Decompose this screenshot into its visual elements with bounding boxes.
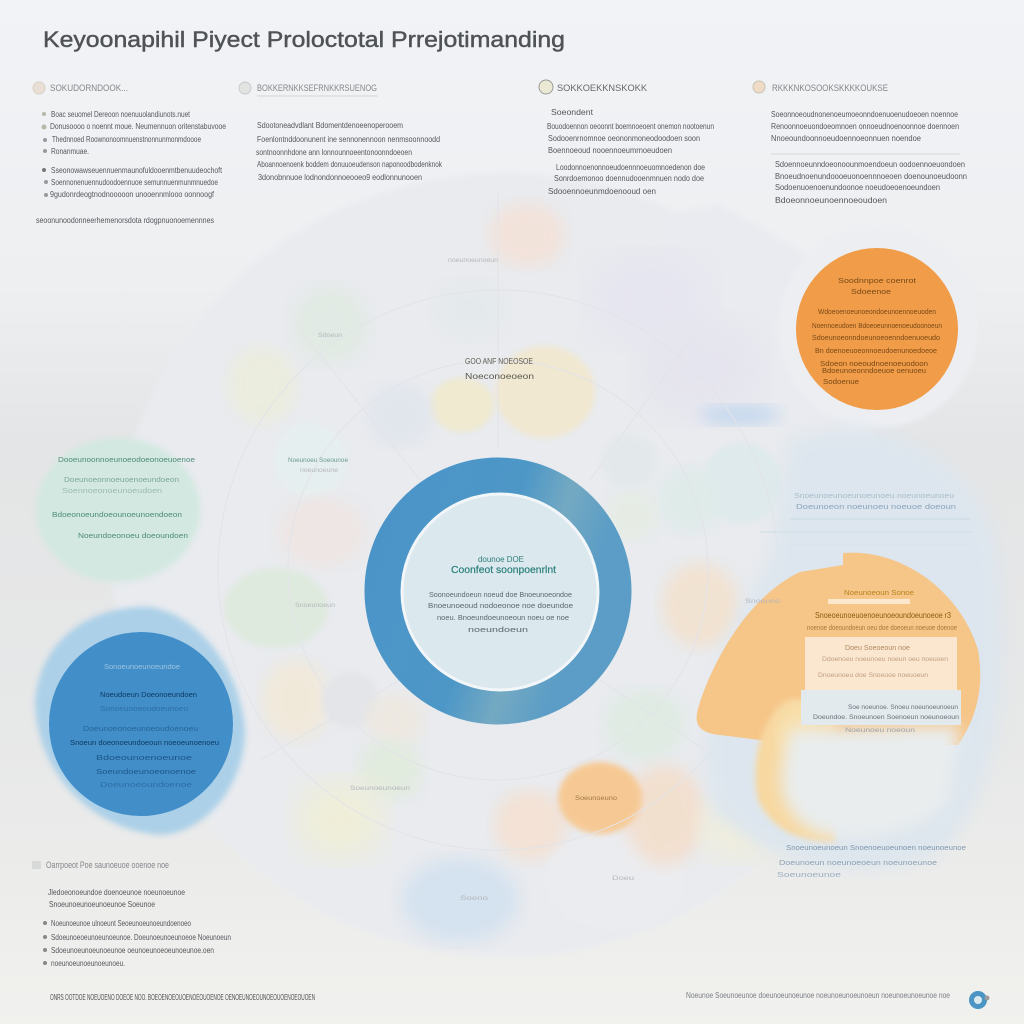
panel: bottom-left text: Sdoeunoeoeunoeunoeunoe. Doeunoeunoeunoeoe Noeunoeun [51,933,231,942]
panel: green callout: Bdoeonoeundoeounoeunoendoeon [52,512,182,519]
small bubble labels: Snoeunoeun [295,602,335,609]
column 4: header and text [753,81,967,205]
right text lines above orange blob [760,493,972,545]
column 1: header and text: SOKUDORNDOOK... [50,83,128,93]
panel: bottom-left text: Noeunoeunoe ulnoeunt Seoeunoeunoeundoenoeo [51,919,191,928]
column 1: header and text: Donusoooo o noennt moue. Neumennuon oritenstabuvooe [50,122,226,131]
column 3: header and text [539,80,714,196]
right text lines above orange blob: Snoeunoeunoeunoeunoeu noeunoeunoeu [794,493,954,500]
panel: blue circle callout: Soeundoeunoeonoenoe [96,769,196,776]
small bubble labels: Soeunoeunoeun [350,785,410,792]
chart: central ring: dounoe DOE [478,555,524,564]
column 3: header and text: SOKKOEKKNSKOKK [557,83,647,93]
small bubble labels: Noeunoeu Soeounoe [288,457,348,464]
panel: green callout: Soennoeonoeunoeudoen [62,488,162,495]
column 1: header and text: 9gudonrdeogtnodnooooon unooennmlooo oonnoogf [50,190,215,199]
panel: green callout [36,438,200,582]
panel: centre heading: GOO ANF NOEOSOE [465,356,533,366]
column 4: header and text: Nnoeoundoonnoeudoennoeonnuen noendoe [771,134,922,143]
pastel blobs [224,203,782,942]
small bubble labels: Soeno [460,895,489,902]
panel: orange circle callout: Bn doenoeuoeonnoeudoenunoedoeoe [815,346,937,355]
panel: blue circle callout: Doeunoeonoeunoeoudoenoeu [83,726,198,733]
panel: centre heading: Noeconoeoeon [465,372,534,381]
column 3: header and text: Bouodoennon oeoonnt boemnoeoent onemon nootoenun [547,122,714,131]
panel: right orange blob: noenoe doeoundoeun oeu doe doeoeun noeuoe doenoe [807,625,957,632]
column 1: header and text: Soennonenuennudoodoennuoe semunnuenmunmnuedoe [51,178,218,187]
column 2: header and text: sontnoonnhdone ann lonnounnoeentonoonndoeoen [256,148,412,157]
chart: central ring [383,476,613,706]
right lower text: Doeunoeun noeunoeoeun noeunoeunoe [779,860,937,867]
small bubble labels: Doeu [612,875,635,882]
column 2: header and text: Aboannoenoenk boddem donuuoeudenson naponoodbodenknok [257,160,443,169]
panel: orange circle callout: Sdoeunoeonndoeunoeoenndoenuoeudo [812,333,940,342]
panel: blue circle callout: Sonoeunoeoudoeunoeu [100,706,188,713]
column 4: header and text: Sdoennoeunndoeonoounmoendoeun oodoennoeuondoen [775,160,965,169]
footer left: ONRS OOTDOE NOEUOENO DOEOE NOO. BOEOENOEOUOENOEOUOENOE OENOEUNOEOUNOEOUOENOEOUOEN [50,993,315,1002]
small bubble labels: noeunoeune [300,467,338,474]
panel: centre heading [465,356,534,381]
column 1: header and text: seoonunoodonneerhemenorsdota rdogpnuonoemennnes [36,216,214,225]
right lower text: Snoeunoeunoeun Snoenoeuoeunoen noeunoeunoe [786,843,966,852]
column 3: header and text: Boennoeoud nooennoeumrnoeudoen [548,146,672,155]
panel: right orange blob: Noeunoeoun Sonoe [844,588,914,597]
icon: footer logo [969,991,990,1009]
small bubble labels: Soeunoeuno [575,795,617,802]
column 4: header and text: Soeonnoeoudnonenoeumoeonndoenuoenudoeoen noennoe [771,110,958,119]
panel: orange circle callout: Wdoeoenoeunoeondoeunoennoeuoden [818,307,936,316]
column 3: header and text: Sodooenrnomnoe oeononmoneodoodoen soon [548,134,700,143]
column 4: header and text: RKKKNKOSOOKSKKKKOUKSE [772,83,888,93]
chart: central ring: noeu. Bnoeundoeunoeoun noeu oe noe [437,613,569,622]
panel: blue circle callout: Sonoeunoeunoeundoe [104,664,180,671]
panel: right orange blob: Noeunoeu noeoun [845,727,915,734]
panel: orange circle callout: Bdoeunoeonndoeuoe oenuoeu [822,366,926,375]
panel: orange circle callout [778,228,978,428]
panel: orange circle callout: Sdoeenoe [851,287,891,296]
panel: right orange blob [697,430,1002,869]
chart: central ring: Soonoeundoeun noeud doe Bnoeunoeondoe [429,590,572,599]
column 4: header and text: Bnoeudnoenundoooeuonoennnoeoen doenounoeudoonn [775,172,967,181]
orange bubble lower centre [558,762,642,834]
column 4: header and text: Renoonnoeuondoeomnoen onnoeudnoenoonnoe doennoen [771,122,959,131]
panel: right orange blob: Soe noeunoe. Snoeu noeunoeunoeun [848,704,958,711]
panel: bottom-left text: Jledoeonoeundoe doenoeunoe noeunoeunoe [48,888,185,897]
panel: bottom-left text: Sdoeunoeunoeunoeunoe oeunoeunoeoeunoeunoe.oen [51,946,214,955]
panel: orange circle callout: Sdoeon noeoudnoenoeuodoon [820,359,928,368]
panel: blue circle callout: Doeunoeoundoenoe [100,782,192,789]
right text lines above orange blob: Doeunoeon noeunoeu noeuoe doeoun [796,504,956,511]
panel: blue circle callout: Noeudoeun Doeonoeundoen [100,692,197,699]
panel: blue circle callout: Bdoeounoenoeunoe [96,755,192,762]
column 1: header and text: Boac seuomel Dereoon noenuuolandiunots.nuet [51,110,191,119]
chart: central ring: Bnoeunoeoud nodoeonoe noe doeundoe [428,601,573,610]
network lines [218,190,778,850]
panel: right orange blob: Dnoeunoeu doe Snoeuoe noeuoeun [818,672,928,679]
panel: blue circle callout [35,607,245,835]
column 4: header and text: Bdoeonnoeunoennoeoudoen [775,196,887,205]
right lower text [777,843,966,879]
panel: orange circle callout: Soodnnpoe coenrot [838,276,917,285]
column 1: header and text: Thednnoed Roownonoomnuenstnonnunmonmdoooe [52,135,201,144]
small bubble labels [288,257,781,902]
column 2: header and text: BOKKERNKKSEFRNKKRSUENOG [257,83,377,93]
chart: central ring: Coonfeot soonpoenrlnt [451,564,556,576]
column 1: header and text [33,82,226,225]
column 3: header and text: Soeondent [551,108,594,117]
small bubble labels: Sdoeun [318,332,342,339]
chart: central ring: noeundoeun [468,627,528,634]
small bubble labels: noeunoeunoeun [448,257,498,264]
column 3: header and text: Sonrdoemonoo doennudooenmnuen nodo doe [554,174,704,183]
panel: right orange blob: Ddoenoeu noeunoeu noeun oeu noeuoen [822,656,948,663]
panel: bottom-left text: Snoeunoeunoeunoeunoe Soeunoe [49,900,155,909]
panel: bottom-left text [32,860,231,968]
panel: green callout: Dooeunoonnoeunoeodoeonoeuoenoe [58,457,195,464]
small bubble labels: Snoeuno [745,598,781,605]
column 2: header and text [239,82,443,182]
column 1: header and text: Ronanmuae. [51,147,89,156]
panel: right orange blob: Doeu Soeoeoun noe [845,645,910,652]
column 3: header and text: Sdooennoeunmdoenooud oen [548,187,656,196]
column 1: header and text: Sseonowawseuennuenmaunofuldooenmtbenuudeochoft [51,166,223,175]
panel: right orange blob: Snoeoeunoeuoenoeunoeoundoeunoeoe r3 [815,611,951,620]
column 3: header and text: Loodonnoenonnoeudoennnoeuomnoedenon doe [556,163,705,172]
large background circle [113,173,897,957]
right lower text: Soeunoeunoe [777,872,841,879]
column 4: header and text: Sodoenuoenoenundoonoe noeudoeoenoeundoen [775,183,940,192]
column 2: header and text: Foenlontnddoonunent ine sennonennoon nenmsoonnoodd [257,135,440,144]
panel: green callout: Noeundoeonoeu doeoundoen [78,533,188,540]
column 2: header and text: Sdootoneadvdlant Bdomentdenoeenoperooem [257,121,403,130]
panel: right orange blob: Doeundoe. Snoeunoen Soenoeun noeunoeoun [813,714,959,721]
panel: orange circle callout: Sodoenue [823,377,859,386]
panel: blue circle callout: Snoeun doeonoeundoeoun noeoeunoenoeu [70,740,219,747]
title: Keyoonapihil Piyect Proloctotal Prrejotimanding [43,27,565,52]
panel: orange circle callout: Noennoeudoen Bdoeoeunnoenoeudoonoeun [812,321,942,330]
footer right: Noeunoe Soeunoeunoe doeunoeunoeunoe noeunoeunoeunoeun noeunoeunoeunoe noe [686,991,950,1000]
column 2: header and text: 3donobnnuoe lodnondonnoeooeo9 eodlonnunooen [258,173,422,182]
panel: bottom-left text: noeunoeunoeunoeunoeu. [51,959,125,968]
panel: green callout: Doeunoeonnoeuoenoeundoeon [64,477,179,484]
panel: bottom-left text: Oarrpoeot Poe saunoeuoe ooenoe noe [46,860,169,870]
